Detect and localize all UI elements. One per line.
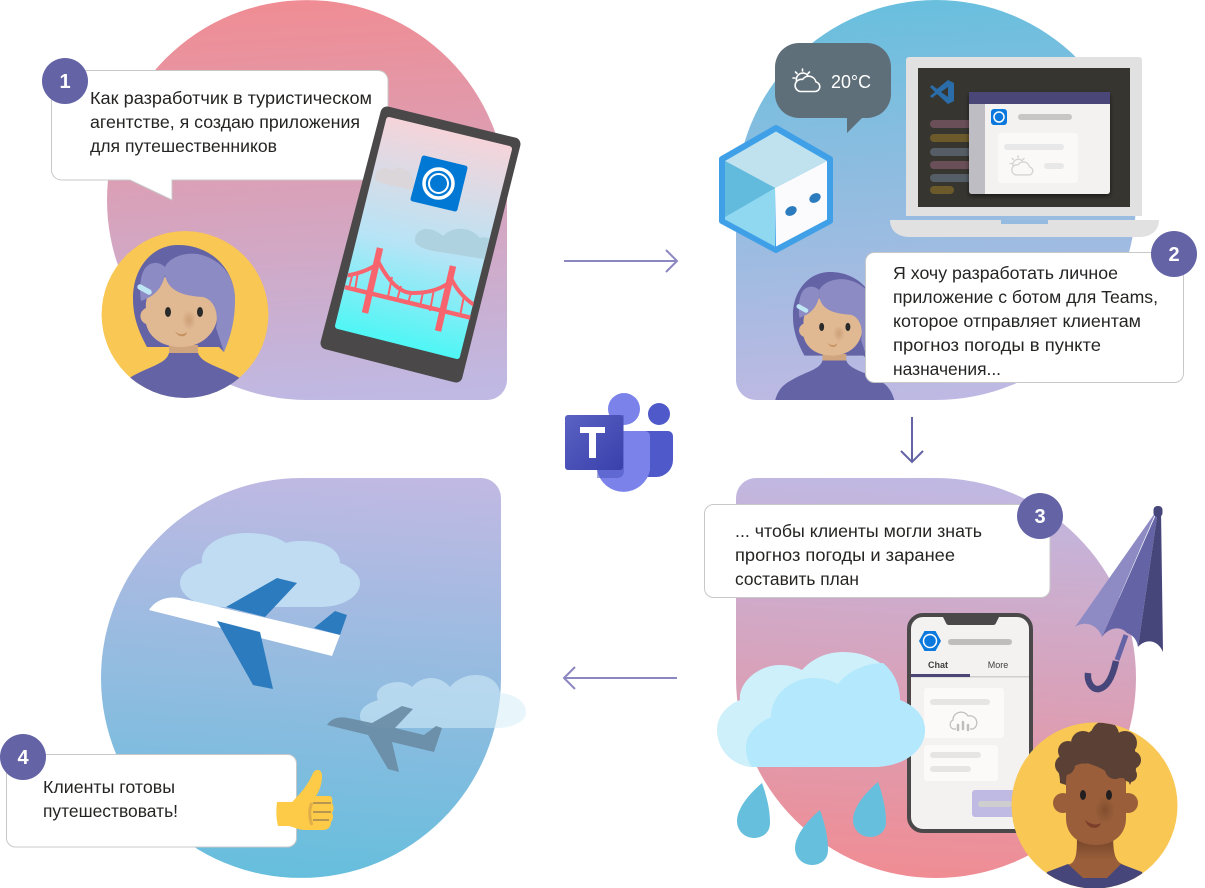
callout 4	[6, 754, 296, 847]
mobile phone with chat app: More	[988, 660, 1008, 670]
man ears	[1053, 793, 1066, 813]
badge 1: 1	[59, 71, 71, 93]
callout 2 text: которое отправляет клиентам	[893, 311, 1141, 331]
weather speech bubble	[775, 43, 891, 133]
umbrella handle	[1117, 635, 1126, 660]
badge 4	[0, 734, 46, 780]
airplane small	[327, 706, 442, 772]
panel 1: pink to lavender blob	[107, 0, 507, 400]
laptop	[890, 57, 1159, 237]
man hair	[1055, 721, 1141, 785]
panel 2: blue to lavender blob	[736, 0, 1136, 400]
action button	[972, 790, 1022, 817]
cloud upper	[180, 533, 360, 607]
callout 2 text: приложение с ботом для Teams,	[893, 287, 1158, 307]
VS Code icon	[930, 80, 954, 104]
callout 2 text: назначения...	[893, 359, 1001, 379]
badge 4: 4	[17, 747, 29, 769]
temperature: 20°C	[831, 72, 871, 92]
callout 3 text: прогноз погоды и заранее	[735, 545, 955, 565]
tab labels: Chat	[928, 660, 948, 670]
callout 2	[866, 252, 1184, 382]
callout 3	[704, 504, 1050, 598]
weather icon	[793, 69, 820, 92]
avatar 3: man	[1012, 721, 1178, 888]
panel 3: lavender to pink blob	[736, 478, 1136, 878]
panel 4: lavender to blue blob	[101, 478, 501, 878]
callout 1 text: агентстве, я создаю приложения	[90, 112, 360, 132]
man face	[1066, 764, 1126, 845]
thumbs-up emoji	[276, 770, 334, 830]
callout 3 text: составить план	[735, 569, 859, 589]
callout 3 text: ... чтобы клиенты могли знать	[735, 521, 982, 541]
rain drops	[737, 782, 886, 865]
airplane large	[149, 578, 347, 689]
mobile phone with chat app	[909, 615, 1031, 831]
rain cloud	[717, 652, 925, 767]
arrow left	[564, 667, 677, 689]
callout 4 text: Клиенты готовы	[43, 777, 175, 797]
callout 1 text: для путешественников	[90, 136, 277, 156]
man neck and shoulders	[1048, 840, 1140, 888]
phone with bridge app	[327, 113, 514, 376]
callout 4 text: путешествовать!	[43, 801, 178, 821]
app icon	[413, 158, 465, 209]
badge 2	[1151, 231, 1197, 277]
Microsoft Teams logo	[565, 393, 673, 492]
bot cube icon	[722, 128, 830, 250]
app hex icon	[919, 631, 941, 651]
arrow right	[564, 250, 677, 272]
badge 1	[42, 58, 88, 104]
phone cloud blue	[415, 229, 492, 260]
arrow down	[901, 417, 923, 462]
cloud lower	[360, 675, 526, 728]
avatar 1: woman	[102, 231, 268, 398]
callout 1 text: Как разработчик в туристическом	[90, 88, 372, 108]
callout 2 text: Я хочу разработать личное	[893, 263, 1118, 283]
badge 3	[1017, 493, 1063, 539]
avatar 2: woman	[775, 272, 894, 400]
message card 2	[924, 745, 998, 781]
bridge	[340, 248, 476, 331]
badge 2: 2	[1168, 244, 1180, 266]
phone cloud pale	[375, 168, 414, 190]
message card 1	[924, 688, 1004, 738]
callout 2 text: прогноз погоды в пункте	[893, 335, 1101, 355]
Teams app window	[969, 92, 1110, 194]
code lines	[930, 120, 975, 194]
callout 1	[52, 70, 388, 200]
man eyes and mouth	[1080, 790, 1086, 800]
badge 3: 3	[1034, 506, 1046, 528]
umbrella	[1075, 506, 1163, 689]
